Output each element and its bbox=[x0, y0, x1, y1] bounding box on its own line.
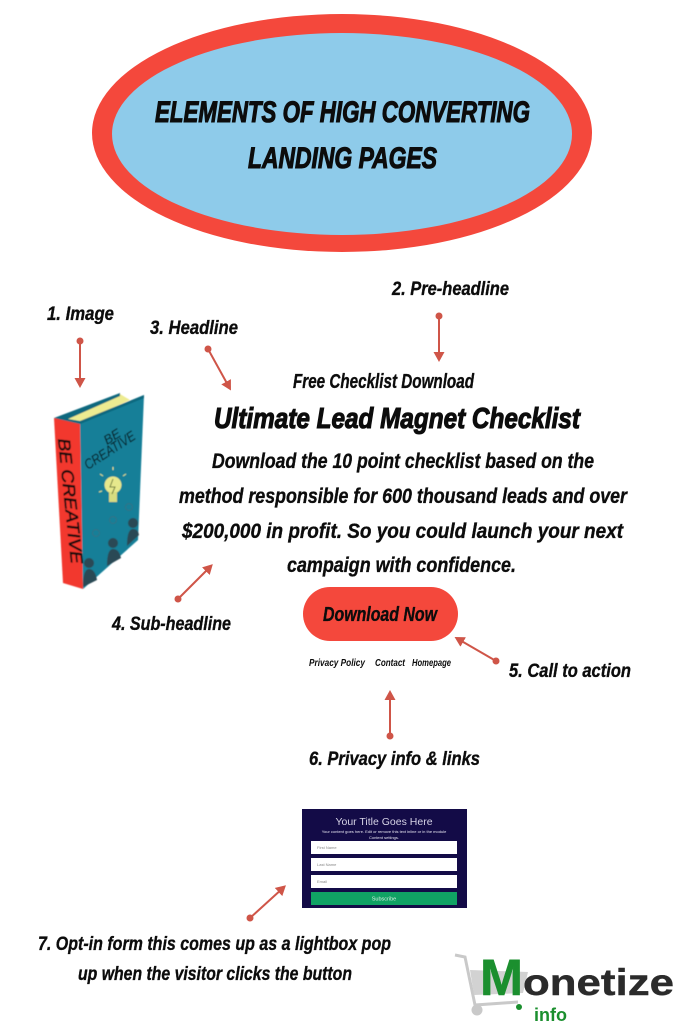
arrow: pre-headline bbox=[436, 312, 442, 358]
title bbox=[155, 96, 530, 175]
opt-in form: Content settings. bbox=[369, 835, 399, 840]
label: 3. Headline: 3. Headline bbox=[150, 318, 238, 339]
icon: shopping cart bbox=[455, 955, 528, 1016]
label: 2. Pre-headline: 2. Pre-headline bbox=[391, 279, 509, 300]
arrow: privacy bbox=[386, 694, 394, 740]
arrow: opt-in form bbox=[246, 888, 283, 922]
pre-headline text: Free Checklist Download bbox=[293, 371, 475, 393]
label: 4. Sub-headline: 4. Sub-headline bbox=[111, 614, 231, 635]
privacy links: Contact bbox=[375, 657, 405, 669]
opt-in form: Your content goes here. Edit or remove this text inline or in the module bbox=[322, 829, 447, 834]
headline text: Ultimate Lead Magnet Checklist bbox=[214, 403, 581, 435]
opt-in form: Your Title Goes Here bbox=[335, 816, 433, 828]
label: 7. Opt-in form: 7. Opt-in form this comes up as a lightbox pop bbox=[38, 934, 391, 955]
privacy links: Privacy Policy bbox=[309, 657, 366, 669]
arrow: call to action bbox=[458, 639, 500, 664]
sub-headline text bbox=[179, 450, 629, 577]
call to action button: Download Now bbox=[323, 604, 438, 626]
opt-in form: First Name bbox=[317, 845, 337, 850]
sub-headline text: campaign with confidence. bbox=[287, 554, 516, 577]
label: 5. Call to action: 5. Call to action bbox=[509, 661, 631, 682]
arrow: headline bbox=[204, 346, 229, 387]
opt-in form: Subscribe bbox=[372, 896, 396, 902]
sub-headline text: Download the 10 point checklist based on the bbox=[212, 450, 594, 473]
privacy links: Homepage bbox=[412, 657, 451, 669]
icon: book: BE CREATIVE bbox=[54, 437, 86, 565]
title: LANDING PAGES bbox=[248, 142, 437, 175]
sub-headline text: $200,000 in profit. So you could launch your next bbox=[181, 520, 624, 543]
label: 7. Opt-in form bbox=[38, 934, 391, 985]
opt-in form: Last Name bbox=[317, 862, 337, 867]
opt-in form bbox=[302, 809, 467, 908]
logo: Monetize info: M bbox=[480, 949, 523, 1006]
logo: Monetize info bbox=[455, 949, 674, 1024]
label: 1. Image: 1. Image bbox=[47, 304, 114, 325]
icon: book bbox=[54, 393, 144, 589]
label: 7. Opt-in form: up when the visitor clicks the button bbox=[78, 964, 352, 985]
label: 6. Privacy info & links: 6. Privacy info & links bbox=[309, 749, 480, 770]
title banner bbox=[92, 14, 592, 252]
opt-in form: Email bbox=[317, 879, 327, 884]
arrow: image bbox=[76, 338, 84, 384]
logo: Monetize info: onetize bbox=[523, 962, 674, 1003]
icon: book: CREATIVE bbox=[81, 427, 139, 473]
arrow: sub-headline bbox=[174, 567, 210, 602]
icon: book: BE bbox=[101, 425, 124, 448]
call to action button bbox=[303, 587, 458, 641]
title: ELEMENTS OF HIGH CONVERTING bbox=[155, 96, 530, 129]
privacy links bbox=[309, 657, 451, 669]
